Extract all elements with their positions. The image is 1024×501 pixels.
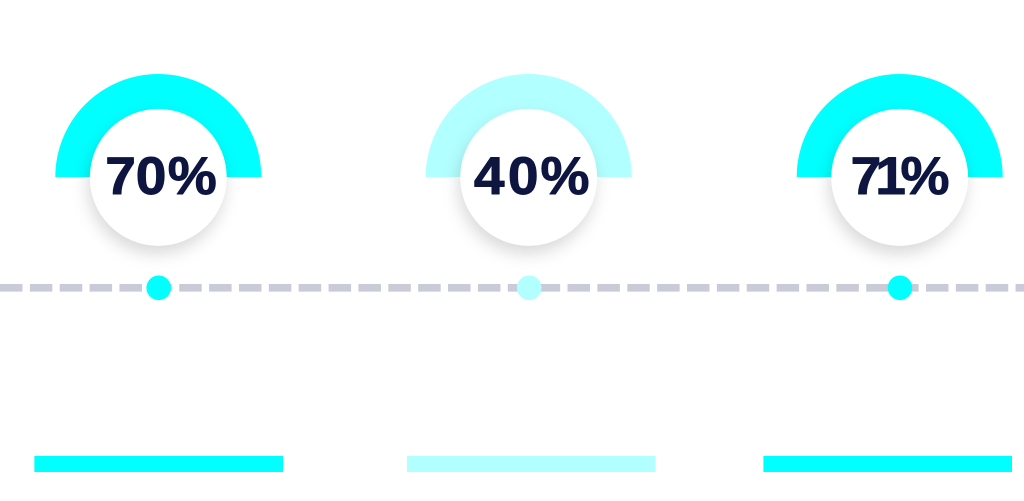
gauge: 40% <box>426 74 632 246</box>
gauge arc 71% <box>797 74 1003 177</box>
bottom bar 3 <box>763 456 1012 472</box>
gauge: 70% <box>55 74 261 246</box>
timeline marker 1 <box>146 276 171 300</box>
gauge disc 71% <box>831 109 968 246</box>
dashed timeline <box>0 284 1024 292</box>
gauge disc 40% <box>460 109 597 246</box>
value 71%: 71% <box>851 147 950 206</box>
value 40%: 40% <box>474 147 590 206</box>
bottom bar 1 <box>34 456 283 472</box>
gauge arc 40% <box>426 74 632 177</box>
gauge arc 70% <box>55 74 261 177</box>
gauge disc 70% <box>90 109 227 246</box>
timeline marker 3 <box>888 276 912 300</box>
gauge: 71% <box>797 74 1003 246</box>
value 70%: 70% <box>105 147 217 206</box>
bottom bar 2 <box>407 456 656 472</box>
timeline marker 2 <box>517 276 542 300</box>
